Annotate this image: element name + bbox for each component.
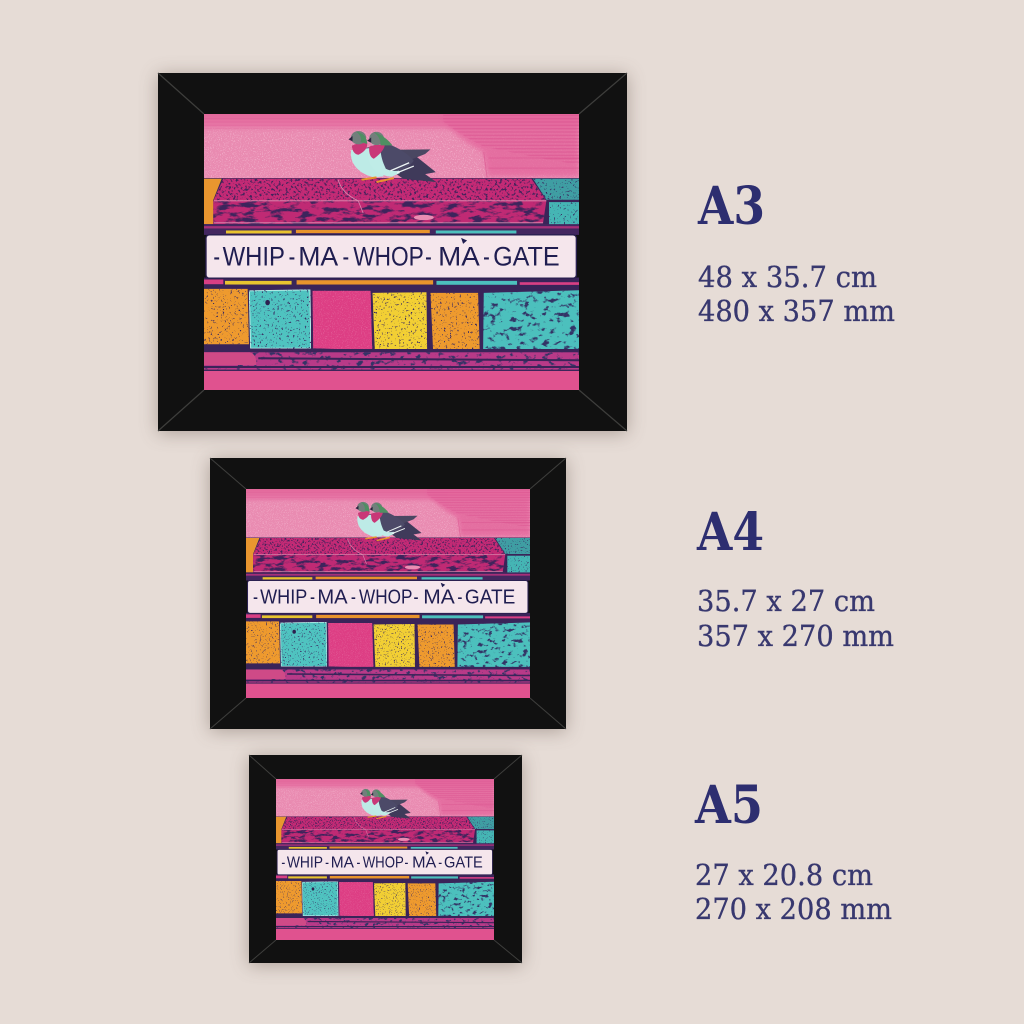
text block: A5 size: [694, 775, 892, 926]
A4 artwork with street sign: WHOP: [359, 587, 412, 609]
A3 artwork with street sign: -: [213, 241, 220, 272]
text block: A3 size: [697, 176, 895, 328]
dimensions in mm: 480 x 357 mm: [698, 294, 895, 328]
A5 artwork with street sign: -: [325, 854, 329, 871]
dimensions in cm: 27 x 20.8 cm: [695, 858, 873, 892]
panel: A4 framed print: [210, 458, 566, 729]
dimensions in cm: 48 x 35.7 cm: [698, 260, 877, 294]
A3 artwork with street sign: MA: [298, 241, 338, 272]
dimensions in mm: 270 x 208 mm: [695, 892, 892, 926]
A3 frame: [158, 73, 627, 431]
A5 artwork with street sign: -: [438, 854, 442, 871]
A3 artwork with street sign: WHIP: [223, 241, 285, 272]
A4 artwork with street sign: WHIP: [260, 587, 307, 609]
A3 artwork with street sign: -: [343, 241, 349, 272]
A4 artwork with street sign: [246, 489, 530, 698]
A3 artwork with street sign: -: [483, 241, 490, 272]
A5 artwork with street sign: GATE: [444, 854, 483, 871]
A5 artwork with street sign: -: [405, 854, 408, 871]
A4 artwork with street sign: MA: [317, 587, 348, 609]
dimensions in cm: 35.7 x 27 cm: [697, 584, 875, 618]
A4 frame: [210, 458, 566, 729]
A4 artwork with street sign: -: [457, 587, 462, 609]
A5 artwork with street sign: -: [357, 854, 360, 871]
A4 artwork with street sign: MA: [423, 587, 455, 609]
A5 frame: [249, 755, 522, 963]
dimensions in mm: 357 x 270 mm: [697, 619, 894, 653]
panel: A3 framed print: [158, 73, 627, 431]
A3 artwork with street sign: -: [425, 241, 432, 272]
A5 artwork with street sign: [276, 779, 494, 940]
heading: A3: A3: [697, 176, 765, 237]
heading: A5: A5: [694, 775, 763, 836]
A3 artwork with street sign: MA: [438, 241, 480, 272]
A5 artwork with street sign: WHIP: [287, 854, 323, 871]
text block: A4 size: [696, 502, 894, 653]
A4 artwork with street sign: -: [310, 587, 315, 609]
heading: A4: A4: [696, 502, 764, 563]
A5 artwork with street sign: -: [281, 854, 285, 871]
A3 artwork with street sign: -: [289, 241, 295, 272]
A3 artwork with street sign: WHOP: [353, 241, 424, 272]
A4 artwork with street sign: -: [253, 587, 258, 609]
panel: A5 framed print: [249, 755, 522, 963]
A5 artwork with street sign: MA: [412, 854, 437, 871]
A5 artwork with street sign: WHOP: [363, 854, 404, 871]
A4 artwork with street sign: -: [413, 587, 419, 609]
A4 artwork with street sign: GATE: [465, 587, 515, 609]
A4 artwork with street sign: -: [351, 587, 356, 609]
A3 artwork with street sign: GATE: [493, 241, 560, 272]
A3 artwork with street sign: [204, 114, 579, 390]
A5 artwork with street sign: MA: [331, 854, 355, 871]
